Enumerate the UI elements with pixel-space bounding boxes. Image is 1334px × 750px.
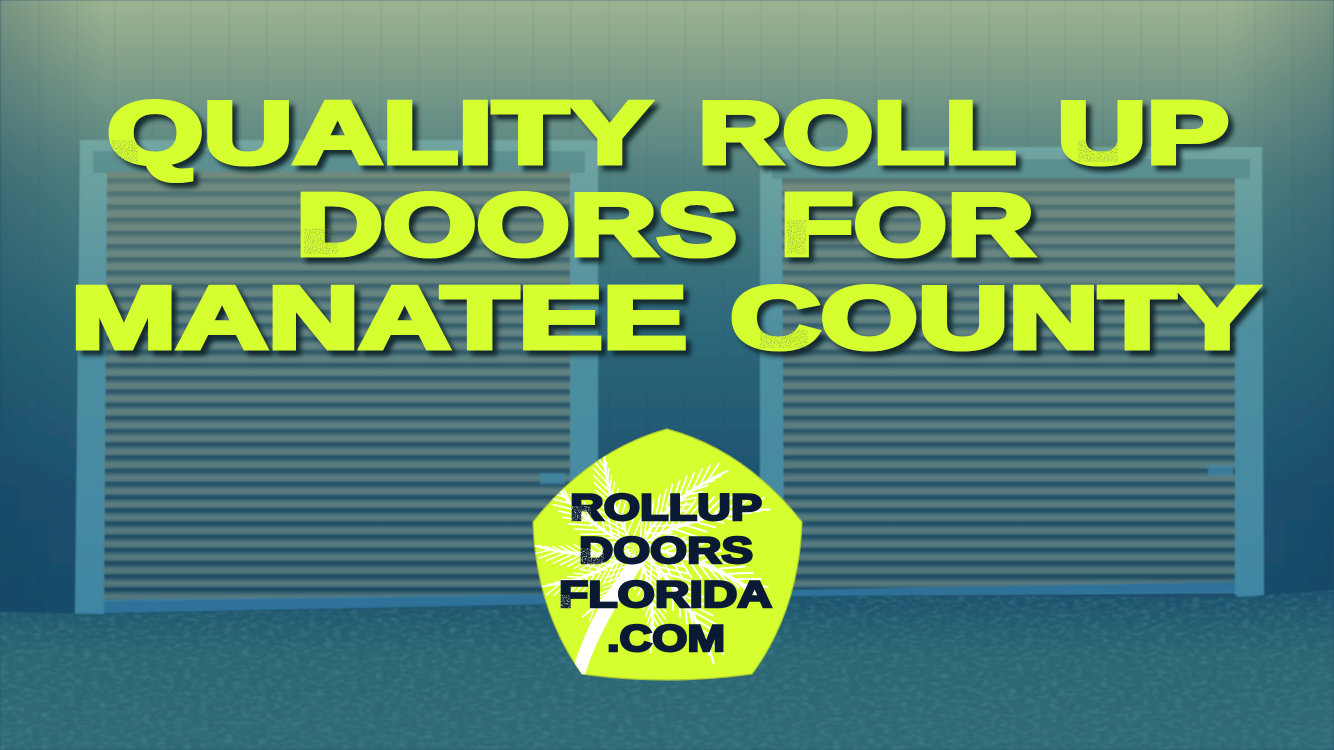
right door frame [760,147,1264,597]
right door curtain [782,178,1235,590]
grass foreground [0,588,1334,750]
title: MANATEE [71,268,687,367]
left door frame [75,140,598,617]
logo text: ROLLUP [570,487,762,528]
left roll up door [75,140,598,617]
icon: palm tree [534,456,772,674]
logo badge [527,429,802,680]
title: COUNTY [730,268,1259,367]
right roll up door [760,147,1264,597]
logo text distress specks [560,506,604,609]
left door curtain [104,172,570,600]
title [71,83,1259,367]
title: DOORS [296,175,737,274]
logo text: DOORS [579,530,753,571]
title: QUALITY [107,83,651,182]
title: FOR [780,175,1034,274]
title: UP [1057,83,1229,182]
title distress specks [112,140,1118,348]
logo text: FLORIDA [559,574,772,615]
logo text: .COM [607,618,725,659]
logo text [559,487,772,659]
title: ROLL [698,83,1016,182]
